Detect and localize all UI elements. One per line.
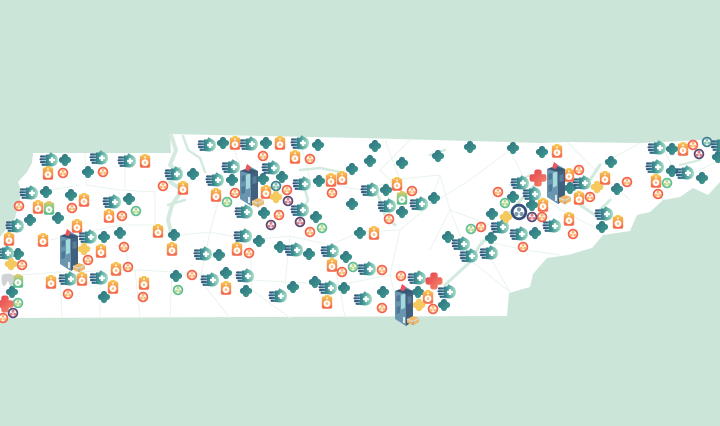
county borders [20,140,720,318]
icons: large red crosses [0,170,546,312]
icons: hands holding a cross [0,135,720,305]
icon: large navy people circle [512,205,526,219]
state map outline [0,134,720,318]
icons: purple people circles [9,150,703,317]
icons: dark teal clover crosses [6,137,720,311]
building: central [240,164,264,208]
icons: green medical bags [13,191,407,288]
building: east [547,162,571,204]
rivers [165,135,700,285]
icons: teal people circles [272,138,711,190]
building: west [60,229,85,272]
icon: grey tooth [2,274,14,286]
icons: green people circles [14,179,671,307]
building: south [395,284,419,326]
icons: yellow crosses [5,181,603,311]
icons: orange medical bags [4,136,688,309]
icons: red people circles [0,141,697,322]
